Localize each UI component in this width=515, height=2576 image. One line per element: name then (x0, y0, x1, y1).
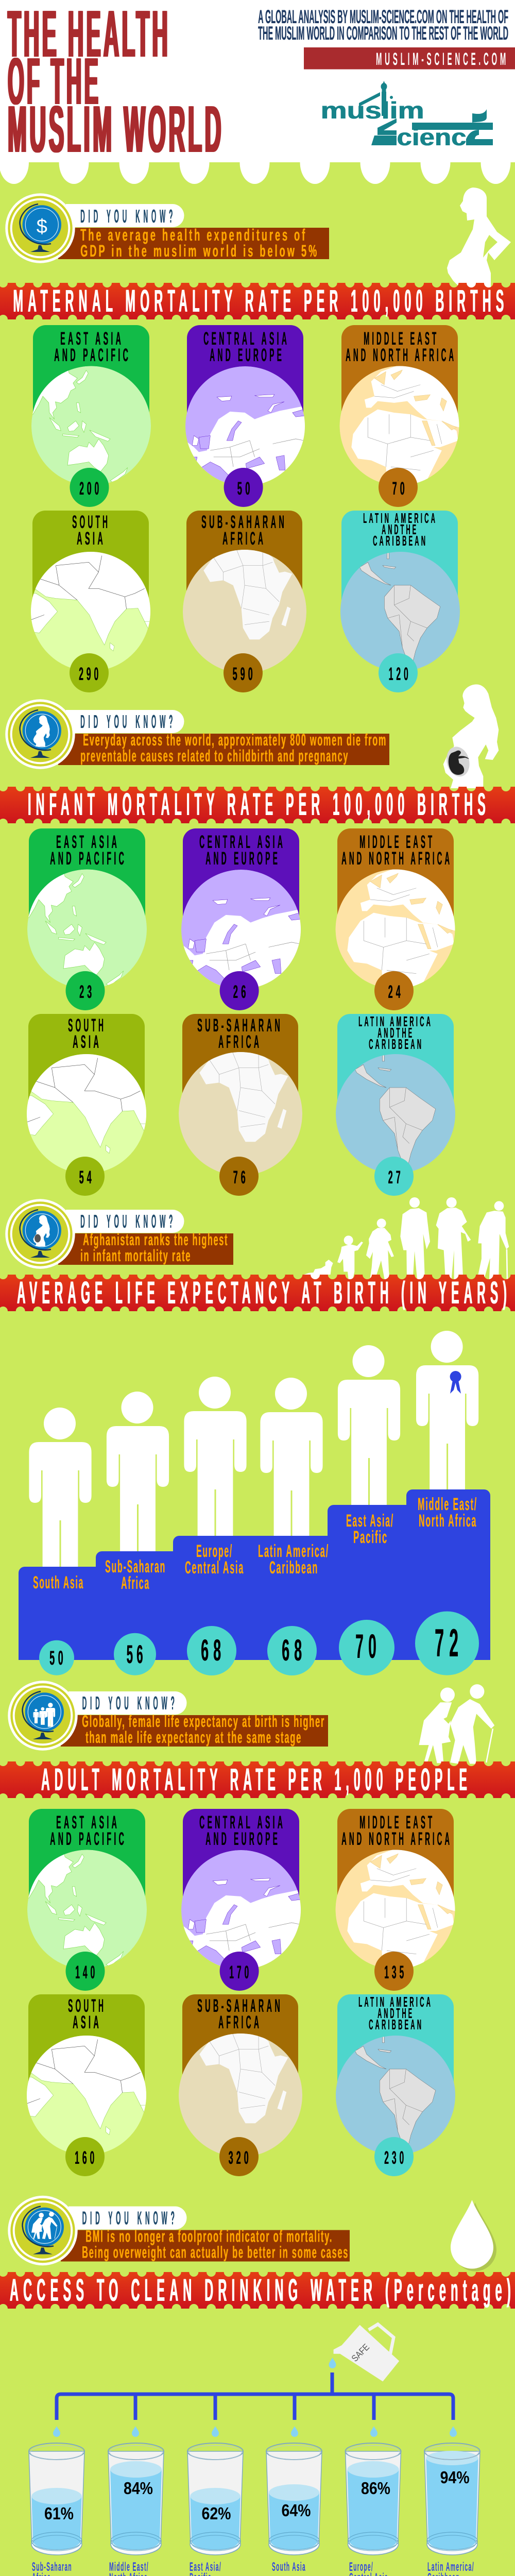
person: Europe / Central Asia (184, 1377, 247, 1537)
panel: Central Asia and Europe: AND EUROPE (205, 849, 280, 869)
panel: Middle East and North Africa: 135 (384, 1962, 407, 1982)
person: Sub-Saharan Africa (107, 1392, 169, 1552)
panel: Middle East and North Africa (336, 1809, 462, 1991)
panel: Latin America and the Caribbean: CARIBBEAN (369, 2016, 423, 2032)
panel: Latin America and the Caribbean: 230 (384, 2148, 407, 2168)
glass percentages: 94% (440, 2468, 470, 2487)
value circles: 68 (282, 1634, 306, 1667)
did you know: BMI (8, 2196, 350, 2265)
glass: Sub-Saharan Africa 61% (29, 2443, 84, 2555)
glass: East Asia 62% (187, 2443, 243, 2555)
value circles (39, 1612, 479, 1675)
panel: Latin America and the Caribbean: ANDTHE (377, 2005, 414, 2021)
icon: pregnant (33, 715, 50, 747)
panel: Middle East and North Africa (340, 325, 467, 507)
value circles: 50 (49, 1647, 66, 1669)
chart: life expectancy people (19, 1331, 490, 1675)
panel: Sub-Saharan Africa: SUB-SAHARAN (197, 1996, 283, 2016)
panel: East Asia and Pacific: 23 (79, 982, 95, 1002)
panel: Latin America and the Caribbean (335, 1013, 456, 1196)
panel: Sub-Saharan Africa: 76 (233, 1167, 248, 1188)
panel: Central Asia and Europe: CENTRAL ASIA (199, 1812, 285, 1833)
panel: East Asia and Pacific: EAST ASIA (56, 832, 119, 852)
panel: South Asia: ASIA (77, 529, 106, 549)
panel: East Asia and Pacific: AND PACIFIC (54, 345, 131, 365)
panel: Sub-Saharan Africa: 320 (229, 2148, 251, 2168)
panel: Latin America and the Caribbean: CARIBBEAN (369, 1036, 423, 1052)
value circles: 70 (355, 1627, 381, 1665)
glass labels: Europe/ (349, 2560, 373, 2574)
panel: East Asia and Pacific: EAST ASIA (60, 329, 124, 349)
panel: Central Asia and Europe (180, 1809, 312, 1993)
subtitle (258, 6, 508, 44)
icon: ages of life silhouettes (304, 1197, 509, 1279)
panel: East Asia and Pacific (20, 325, 151, 507)
glass percentages: 64% (281, 2501, 311, 2520)
glass percentages (44, 2468, 470, 2523)
step labels: Pacific (353, 1528, 388, 1547)
glass labels (32, 2560, 474, 2576)
panel: Central Asia and Europe (180, 828, 312, 1013)
panel: South Asia: ASIA (73, 2012, 101, 2032)
panel: South Asia: ASIA (73, 1032, 101, 1052)
icon: pregnant silhouette (447, 188, 511, 289)
did you know: Afghanistan: Afghanistan ranks the highest (83, 1230, 228, 1249)
panel: Latin America and the Caribbean: CARIBBEAN (373, 533, 427, 549)
icon: elderly (31, 2212, 58, 2239)
person: Middle East (416, 1331, 478, 1491)
panel: South Asia (22, 1994, 153, 2176)
step labels: East Asia/ (346, 1511, 394, 1531)
panel: Central Asia and Europe: CENTRAL ASIA (199, 832, 285, 852)
step labels: Latin America/ (258, 1541, 329, 1561)
panel: Sub-Saharan Africa: AFRICA (218, 1032, 262, 1052)
did you know: health expenditure: GDP in the muslim world is below 5% (80, 242, 319, 260)
panel: South Asia (22, 1014, 153, 1196)
scalloped awning edge (0, 162, 511, 184)
panel: Central Asia and Europe: 170 (229, 1962, 252, 1982)
panel: South Asia: SOUTH (68, 1015, 106, 1036)
panel: Sub-Saharan Africa: AFRICA (222, 529, 266, 549)
panel: East Asia and Pacific: AND PACIFIC (50, 1829, 127, 1849)
panel: East Asia and Pacific (16, 828, 147, 1010)
did you know: preventable causes: DID YOU KNOW? (80, 711, 176, 732)
glass: Europe 86% (345, 2443, 401, 2555)
panel: Latin America and the Caribbean: 120 (388, 664, 411, 684)
panel: Latin America and the Caribbean: ANDTHE (377, 1025, 414, 1041)
panel: Sub-Saharan Africa: AFRICA (218, 2012, 262, 2032)
panel: Central Asia and Europe: AND EUROPE (210, 345, 284, 365)
icon: pouring jug: SAFE (350, 2342, 371, 2364)
glass percentages: 62% (202, 2504, 231, 2523)
step labels: South Asia (33, 1573, 84, 1592)
glass percentages: 61% (44, 2504, 74, 2523)
step labels: Central Asia (185, 1558, 244, 1578)
panel: South Asia: 290 (79, 664, 101, 684)
glass: Middle East 84% (108, 2443, 164, 2555)
panel: Sub-Saharan Africa (183, 511, 306, 692)
section: infant mortality panels (16, 828, 462, 1196)
glass labels: East Asia/ (190, 2560, 221, 2574)
panel: Central Asia and Europe: 50 (237, 479, 253, 499)
panel: South Asia: 54 (79, 1167, 95, 1188)
glass labels: Middle East/ (109, 2560, 149, 2574)
person: East Asia (338, 1345, 400, 1505)
value circles: 68 (201, 1634, 226, 1667)
panel: South Asia: SOUTH (72, 512, 110, 532)
step labels: Europe/ (196, 1541, 233, 1561)
panel: Central Asia and Europe: CENTRAL ASIA (203, 329, 289, 349)
glass percentages: 86% (361, 2479, 390, 2498)
panel: East Asia and Pacific (16, 1809, 147, 1991)
glass: Latin America 94% (424, 2443, 480, 2555)
title (8, 0, 224, 166)
icon: pouring jug (334, 2324, 399, 2381)
step labels: Africa (121, 1573, 150, 1593)
panel: East Asia and Pacific: AND PACIFIC (50, 849, 127, 869)
step labels: Caribbean (269, 1558, 318, 1578)
icon: pregnant silhouette with fetus (443, 684, 499, 788)
title: OF THE (8, 44, 101, 118)
panel: South Asia: 160 (75, 2148, 97, 2168)
icon: ribbon (450, 1371, 461, 1394)
did you know: life expectancy: DID YOU KNOW? (82, 1692, 178, 1714)
glass percentages: 84% (124, 2479, 153, 2498)
stepped base (19, 1489, 490, 1660)
section: maternal mortality panels (20, 325, 467, 692)
icon: water drop (451, 2200, 496, 2271)
did you know: health expenditure: DID YOU KNOW? (80, 206, 176, 227)
panel: Central Asia and Europe: AND EUROPE (205, 1829, 280, 1849)
chart: water glasses (29, 2324, 480, 2576)
panel: Sub-Saharan Africa (179, 1014, 302, 1196)
panel: Latin America and the Caribbean: 27 (388, 1167, 404, 1188)
panel: Sub-Saharan Africa (179, 1994, 302, 2176)
panel: Central Asia and Europe (184, 325, 316, 510)
pipes (57, 2372, 453, 2420)
panel: Latin America and the Caribbean (339, 510, 461, 692)
person: Latin America (260, 1378, 323, 1538)
value circles: 56 (127, 1640, 146, 1669)
step labels (33, 1495, 477, 1593)
icon: pregnant with fetus (33, 1215, 50, 1246)
panel: Sub-Saharan Africa: SUB-SAHARAN (201, 512, 287, 532)
step labels: Sub-Saharan (105, 1557, 166, 1577)
did you know: Afghanistan (5, 1199, 233, 1269)
panel: Central Asia and Europe: 26 (233, 982, 249, 1002)
glass labels: Sub-Saharan (32, 2560, 72, 2574)
panel: East Asia and Pacific: 140 (75, 1962, 98, 1982)
did you know: Afghanistan: in infant mortality rate (80, 1246, 191, 1265)
icon: family (33, 1703, 55, 1727)
panel: Middle East and North Africa (336, 828, 462, 1010)
glass: South Asia 64% (266, 2443, 322, 2555)
panel: Latin America and the Caribbean (335, 1994, 456, 2176)
website bar (304, 47, 515, 69)
did you know: preventable causes (5, 699, 389, 769)
icon: dollar: $ (37, 216, 47, 238)
person: South Asia (29, 1408, 92, 1568)
glass labels: South Asia (272, 2560, 306, 2574)
panel: South Asia: SOUTH (68, 1996, 106, 2016)
value circles: 72 (435, 1621, 464, 1665)
did you know: life expectancy: than male life expectancy at the same stage (85, 1728, 302, 1747)
panel: East Asia and Pacific: EAST ASIA (56, 1812, 119, 1833)
did you know: BMI: DID YOU KNOW? (82, 2207, 178, 2229)
panel: East Asia and Pacific: 200 (79, 479, 102, 499)
did you know: health expenditure (5, 193, 329, 263)
section: adult mortality panels (16, 1809, 462, 2176)
did you know: Afghanistan: DID YOU KNOW? (80, 1211, 176, 1232)
panel: Sub-Saharan Africa: SUB-SAHARAN (197, 1015, 283, 1036)
panel: South Asia (26, 511, 158, 692)
logo: cienc (397, 124, 466, 150)
did you know: life expectancy (8, 1681, 328, 1751)
did you know: health expenditure: The average health expenditures of (80, 226, 307, 244)
panel: Sub-Saharan Africa: 590 (233, 664, 255, 684)
header (0, 0, 515, 184)
panel: Middle East and North Africa: 24 (388, 982, 404, 1002)
icon: elderly couple (419, 1684, 494, 1764)
logo (320, 81, 493, 150)
panel: Latin America and the Caribbean: ANDTHE (382, 521, 418, 537)
panel: Middle East and North Africa: 70 (392, 479, 408, 499)
logo: muslim (320, 97, 424, 124)
